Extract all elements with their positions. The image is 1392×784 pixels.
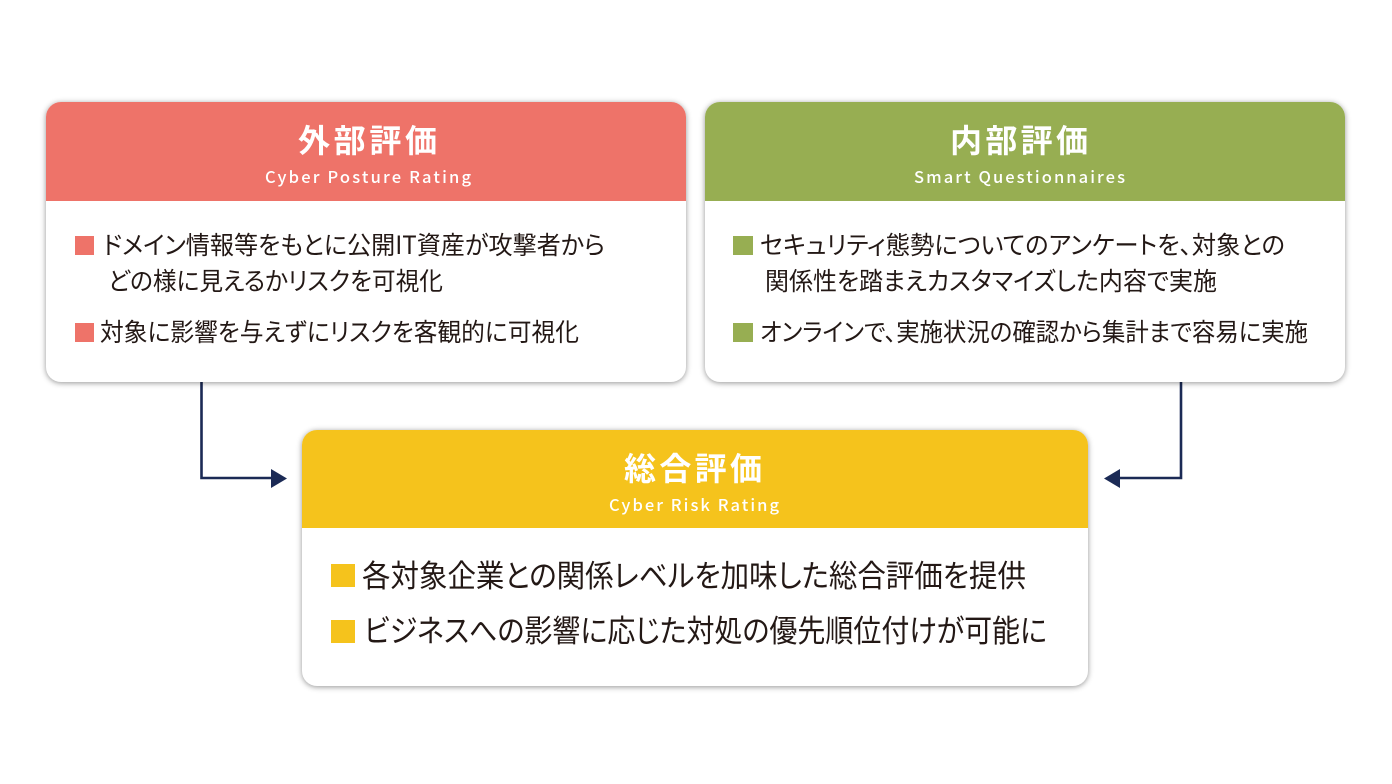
panel: internal rating (705, 102, 1345, 382)
heading: internal rating: 内部評価 (950, 116, 1088, 162)
bullet text: external 1: ドメイン情報等をもとに公開IT資産が攻撃者から (103, 226, 605, 262)
bullet text: internal 2: オンラインで、実施状況の確認から集計まで容易に実施 (760, 313, 1308, 349)
bullet text: overall 1: 各対象企業との関係レベルを加味した総合評価を提供 (362, 551, 1026, 596)
bullet text: internal 1: 関係性を踏まえカスタマイズした内容で実施 (765, 262, 1217, 298)
bullet text: external 1: どの様に見えるかリスクを可視化 (108, 262, 443, 298)
subheading: Smart Questionnaires: Smart Questionnaires (914, 164, 1125, 188)
bullet text: overall 2: ビジネスへの影響に応じた対処の優先順位付けが可能に (364, 606, 1047, 651)
subheading: Cyber Posture Rating: Cyber Posture Rating (265, 164, 471, 188)
bullet text: external 1 (75, 226, 605, 298)
panel header: internal rating (705, 102, 1345, 201)
heading: external rating: 外部評価 (298, 116, 437, 162)
arrow: external to overall (202, 382, 287, 488)
panel header: overall rating (302, 430, 1088, 528)
heading: overall rating: 総合評価 (624, 444, 762, 490)
panel: external rating (46, 102, 686, 382)
bullet text: internal 1 (733, 226, 1285, 298)
bullet text: external 2: 対象に影響を与えずにリスクを客観的に可視化 (100, 313, 579, 349)
bullet text: internal 1: セキュリティ態勢についてのアンケートを、対象との (760, 226, 1285, 262)
panel: overall rating (302, 430, 1088, 686)
arrow: internal to overall (1104, 382, 1181, 488)
panel header: external rating (46, 102, 686, 201)
subheading: Cyber Risk Rating: Cyber Risk Rating (609, 492, 779, 516)
